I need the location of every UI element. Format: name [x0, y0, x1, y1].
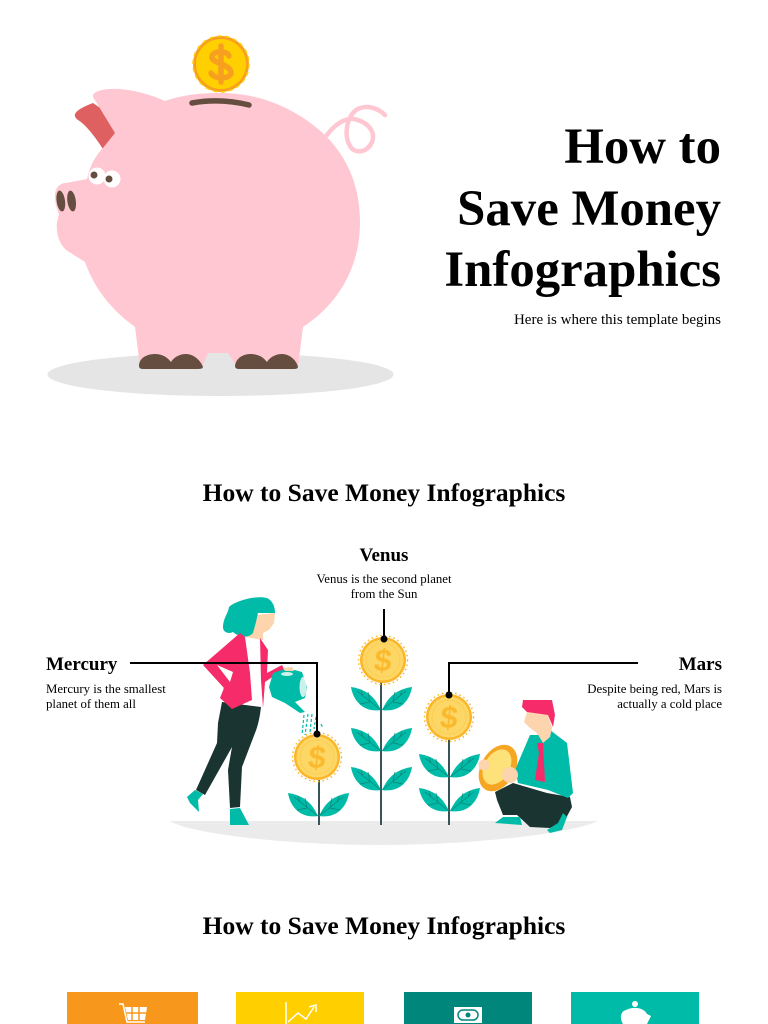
water drops [302, 714, 323, 735]
plant: right [419, 692, 480, 825]
heading: plants section: How to Save Money Infographics [203, 478, 565, 507]
label: mercury: Mercury [46, 654, 118, 675]
heading: cards section: How to Save Money Infographics [203, 911, 565, 940]
man shoes [495, 813, 567, 833]
illustration: woman watering [187, 597, 323, 825]
ground shadow [170, 821, 598, 845]
icon: banknote [454, 1007, 482, 1023]
plant: left [288, 732, 349, 825]
label: mars: Mars [679, 654, 722, 675]
label: mercury: planet of them all [46, 697, 136, 711]
label: mercury [46, 654, 166, 711]
label: mars: Despite being red, Mars is [587, 682, 722, 696]
title: How to [564, 118, 721, 174]
big coin [471, 738, 525, 798]
pig hooves [139, 354, 298, 369]
woman jacket [203, 633, 252, 709]
woman right sleeve [260, 638, 284, 708]
label: venus [316, 545, 452, 601]
title: Save Money [457, 180, 721, 236]
man hands [478, 760, 518, 783]
can highlights [281, 672, 306, 697]
label: mars [587, 654, 722, 711]
woman trousers [196, 702, 261, 808]
label: mercury: Mercury is the smallest [46, 682, 166, 696]
woman hair [223, 597, 275, 637]
can hand [283, 667, 294, 671]
pig tail [327, 107, 385, 151]
label: mars: actually a cold place [617, 697, 722, 711]
man hair [522, 700, 555, 727]
pig nostrils [55, 190, 77, 212]
card: yellow [236, 992, 364, 1024]
icon: growth chart [286, 1002, 316, 1024]
title: Infographics [444, 241, 721, 297]
pig body [55, 89, 360, 367]
label: venus: Venus [360, 545, 408, 566]
man shirt [515, 730, 573, 798]
man tie [535, 743, 545, 782]
callout line: mercury [130, 663, 320, 738]
woman shoes [187, 790, 249, 825]
illustration: man with coin [471, 700, 573, 833]
label: venus: from the Sun [351, 587, 418, 601]
man trousers [495, 783, 572, 828]
icon: shopping cart [119, 1004, 147, 1022]
label: venus: Venus is the second planet [316, 572, 452, 586]
pig eyes [88, 168, 120, 188]
card: dark teal [404, 992, 532, 1024]
pig coin slot [192, 101, 249, 105]
man face [524, 712, 552, 743]
woman hand [223, 682, 248, 695]
watering can [269, 668, 307, 713]
pig ear inner [75, 103, 125, 149]
plant: centre [351, 636, 412, 825]
icon: piggy bank [621, 1001, 651, 1024]
callout line: mars [446, 663, 638, 698]
card: teal [571, 992, 699, 1024]
illustration: piggy bank [48, 36, 394, 396]
gold coin [193, 36, 249, 92]
pig shadow [48, 353, 394, 396]
subtitle: Here is where this template begins [514, 312, 721, 328]
woman shirt [242, 637, 262, 705]
callout line: venus [380, 609, 388, 642]
title [444, 118, 721, 297]
woman face [245, 613, 275, 640]
card: orange [67, 992, 198, 1024]
